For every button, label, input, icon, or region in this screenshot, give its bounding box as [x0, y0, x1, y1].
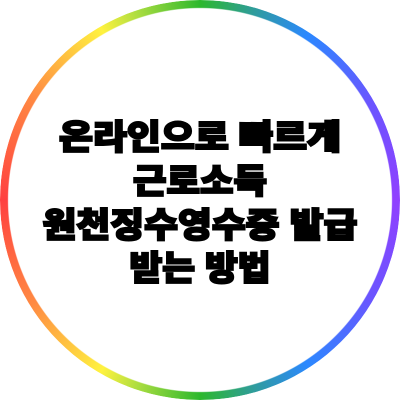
title line 1: 온라인으로 빠르게	[59, 119, 341, 157]
title line 4: 받는 방법	[130, 250, 270, 288]
title line 2: 근로소득	[133, 163, 267, 201]
title line 3: 원천징수영수증 발급	[42, 207, 358, 245]
